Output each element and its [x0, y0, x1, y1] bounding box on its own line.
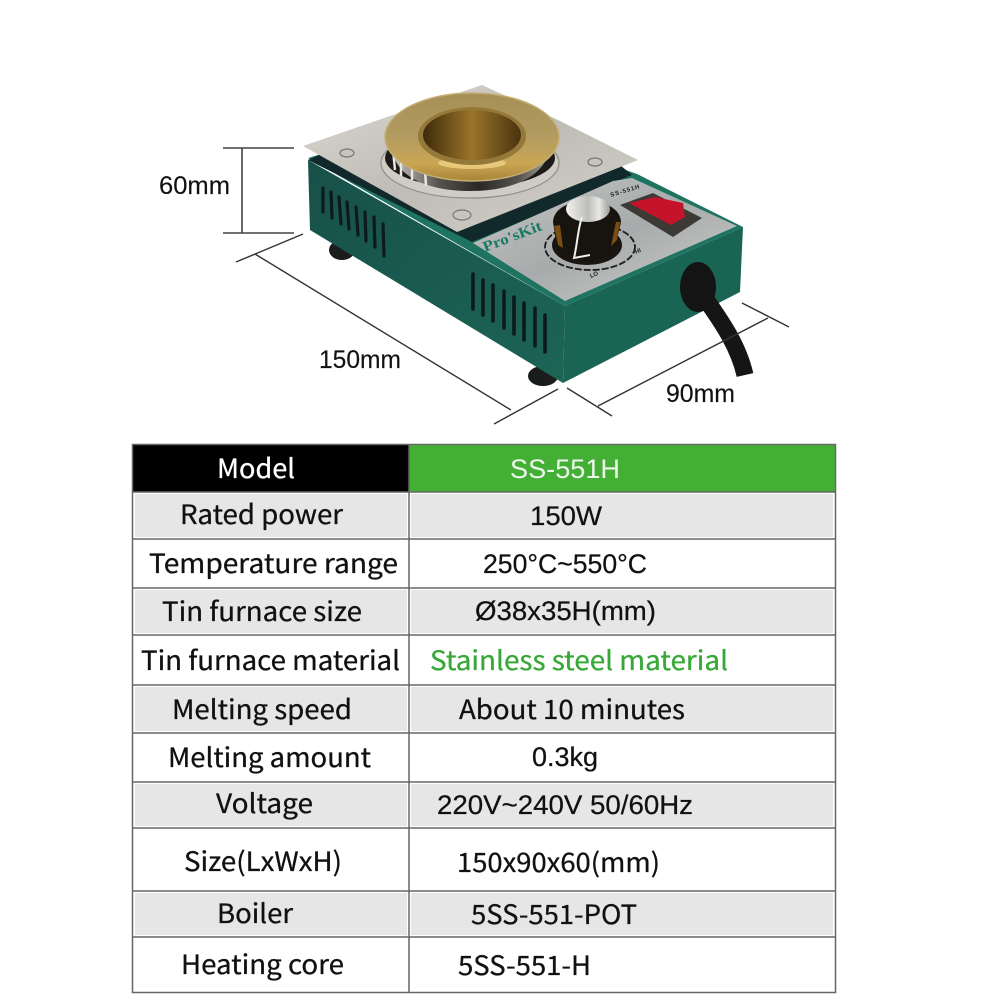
ring lower shine: [438, 157, 506, 169]
specification table: [132, 444, 836, 993]
row: rated power: 150W: [530, 501, 603, 531]
steel cup: [392, 145, 550, 191]
table header row: Model: [217, 447, 295, 486]
inner ring lip: [418, 107, 526, 165]
housing left face: [308, 160, 565, 383]
row: melting speed: Melting speed: [172, 688, 352, 727]
cord: [703, 295, 745, 375]
row: voltage: 220V~240V 50/60Hz: [437, 790, 693, 820]
row: temperature range: Temperature range: [149, 542, 398, 581]
row: tin furnace material: Stainless steel material: [430, 639, 728, 678]
row: size: Size(LxWxH): [184, 840, 342, 879]
red rocker switch: [629, 197, 685, 225]
row: voltage: Voltage: [216, 782, 313, 821]
dial scale: [545, 224, 635, 270]
cup highlight stripes: [393, 150, 426, 186]
dark shadow under plate: [308, 150, 632, 242]
dial labels: HI: [634, 248, 643, 256]
switch bezel: [620, 193, 702, 237]
knob pointer: [574, 217, 590, 258]
row: melting amount: Melting amount: [168, 736, 371, 775]
left vent slots: [323, 188, 384, 256]
rubber feet: [329, 240, 558, 386]
row: size: [184, 840, 660, 880]
height label: 60mm: [159, 172, 230, 200]
width dimension lines: [567, 303, 789, 416]
dial labels: [589, 248, 643, 280]
row: melting amount: [168, 736, 598, 775]
table header row: SS-551H: [510, 454, 620, 484]
cord strain relief: [680, 262, 716, 312]
dial labels: LO: [589, 271, 600, 280]
row: boiler: 5SS-551-POT: [471, 893, 637, 932]
knob skirt: [552, 225, 622, 265]
row: tin furnace size: [135, 590, 833, 633]
row: tin furnace material: Tin furnace material: [141, 639, 400, 678]
pro'skit logo: Pro'sKit: [481, 219, 544, 256]
row: size: 150x90x60(mm): [457, 841, 660, 880]
dimension: length 150mm: [236, 234, 558, 424]
row: temperature range: 250°C~550°C: [483, 549, 647, 579]
row: heating core: Heating core: [181, 943, 344, 982]
plate opening rim: [381, 128, 559, 198]
steel control panel: [473, 178, 737, 301]
brass ring: [385, 93, 559, 181]
row: tin furnace material: [141, 639, 728, 678]
steel top plate: [303, 85, 638, 232]
panel small text: SS-551H: [610, 184, 640, 199]
row: boiler: [135, 892, 833, 935]
row: rated power: Rated power: [180, 493, 344, 532]
right vent slots: [473, 274, 545, 352]
row: tin furnace size: Tin furnace size: [162, 590, 362, 629]
row: rated power: [135, 493, 833, 537]
knob cap: [566, 196, 610, 222]
row: melting speed: [135, 687, 833, 731]
knob body: [553, 201, 621, 262]
height dimension lines: [223, 148, 294, 233]
length dimension lines: [236, 234, 558, 424]
opening shadow slots: [385, 128, 555, 188]
housing right face: [563, 227, 743, 383]
row: boiler: Boiler: [217, 892, 294, 931]
row: voltage: [135, 782, 833, 826]
row: tin furnace size: Ø38x35H(mm): [475, 596, 656, 626]
row: temperature range: [149, 542, 647, 581]
width label: 90mm: [666, 380, 735, 408]
housing top: [308, 153, 743, 306]
row: heating core: 5SS-551-H: [458, 944, 591, 983]
table header row: [132, 444, 836, 492]
plate screws: [340, 149, 602, 220]
product image: solder pot: [303, 85, 745, 386]
dimension: width 90mm: [567, 303, 789, 416]
row: melting amount: 0.3kg: [532, 742, 598, 772]
row: melting speed: About 10 minutes: [459, 688, 685, 727]
pot hole: [423, 110, 521, 160]
length label: 150mm: [319, 346, 401, 374]
dimension: height 60mm: [159, 148, 294, 233]
row: heating core: [181, 943, 591, 983]
knob amber sheen: [554, 222, 620, 248]
